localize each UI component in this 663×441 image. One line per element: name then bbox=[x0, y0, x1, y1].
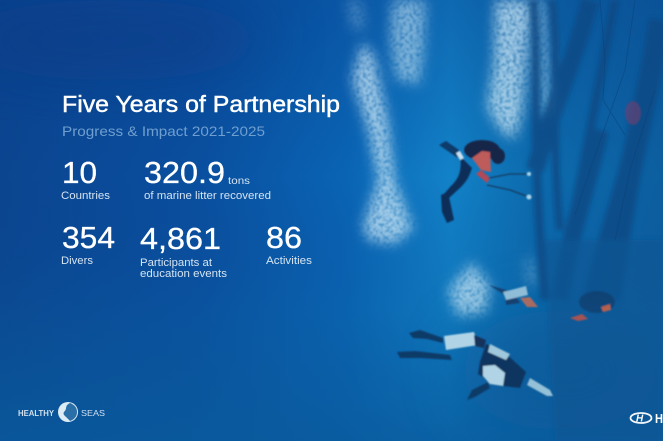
stat: participants: Participants at bbox=[140, 257, 212, 269]
stat: activities: 86 bbox=[266, 220, 302, 255]
stat: tons recovered: tons bbox=[228, 175, 250, 187]
stat: countries: Countries bbox=[61, 190, 111, 202]
stat: tons recovered: of marine litter recovered bbox=[144, 190, 271, 202]
stat: activities: Activities bbox=[266, 255, 313, 267]
stat: tons recovered bbox=[144, 155, 271, 202]
stat: divers: 354 bbox=[62, 220, 115, 255]
stat: participants bbox=[140, 221, 228, 280]
net lines bbox=[575, 0, 655, 240]
stat: countries bbox=[61, 155, 111, 202]
title: Five Years of Partnership bbox=[62, 91, 340, 117]
stat: divers: Divers bbox=[61, 255, 94, 267]
diver: group of three bbox=[397, 285, 615, 400]
stat: participants: education events bbox=[140, 268, 228, 280]
ghost nets bbox=[533, 0, 663, 441]
diver: top bbox=[439, 140, 532, 223]
red net accent bbox=[625, 101, 641, 125]
stat: tons recovered: 320.9 bbox=[144, 155, 225, 190]
bubble columns bbox=[346, 0, 556, 316]
subtitle: Progress & Impact 2021-2025 bbox=[62, 123, 265, 139]
stat: countries: 10 bbox=[62, 155, 97, 190]
logo: Healthy Seas: HEALTHY bbox=[18, 408, 54, 418]
logo: Hyundai (cropped): H bbox=[636, 414, 644, 424]
logo: Healthy Seas bbox=[18, 402, 105, 422]
stat: activities bbox=[266, 220, 313, 267]
logo: Healthy Seas: SEAS bbox=[81, 408, 105, 418]
stat: participants: 4,861 bbox=[140, 221, 221, 256]
logo: Hyundai (cropped) bbox=[630, 411, 663, 426]
